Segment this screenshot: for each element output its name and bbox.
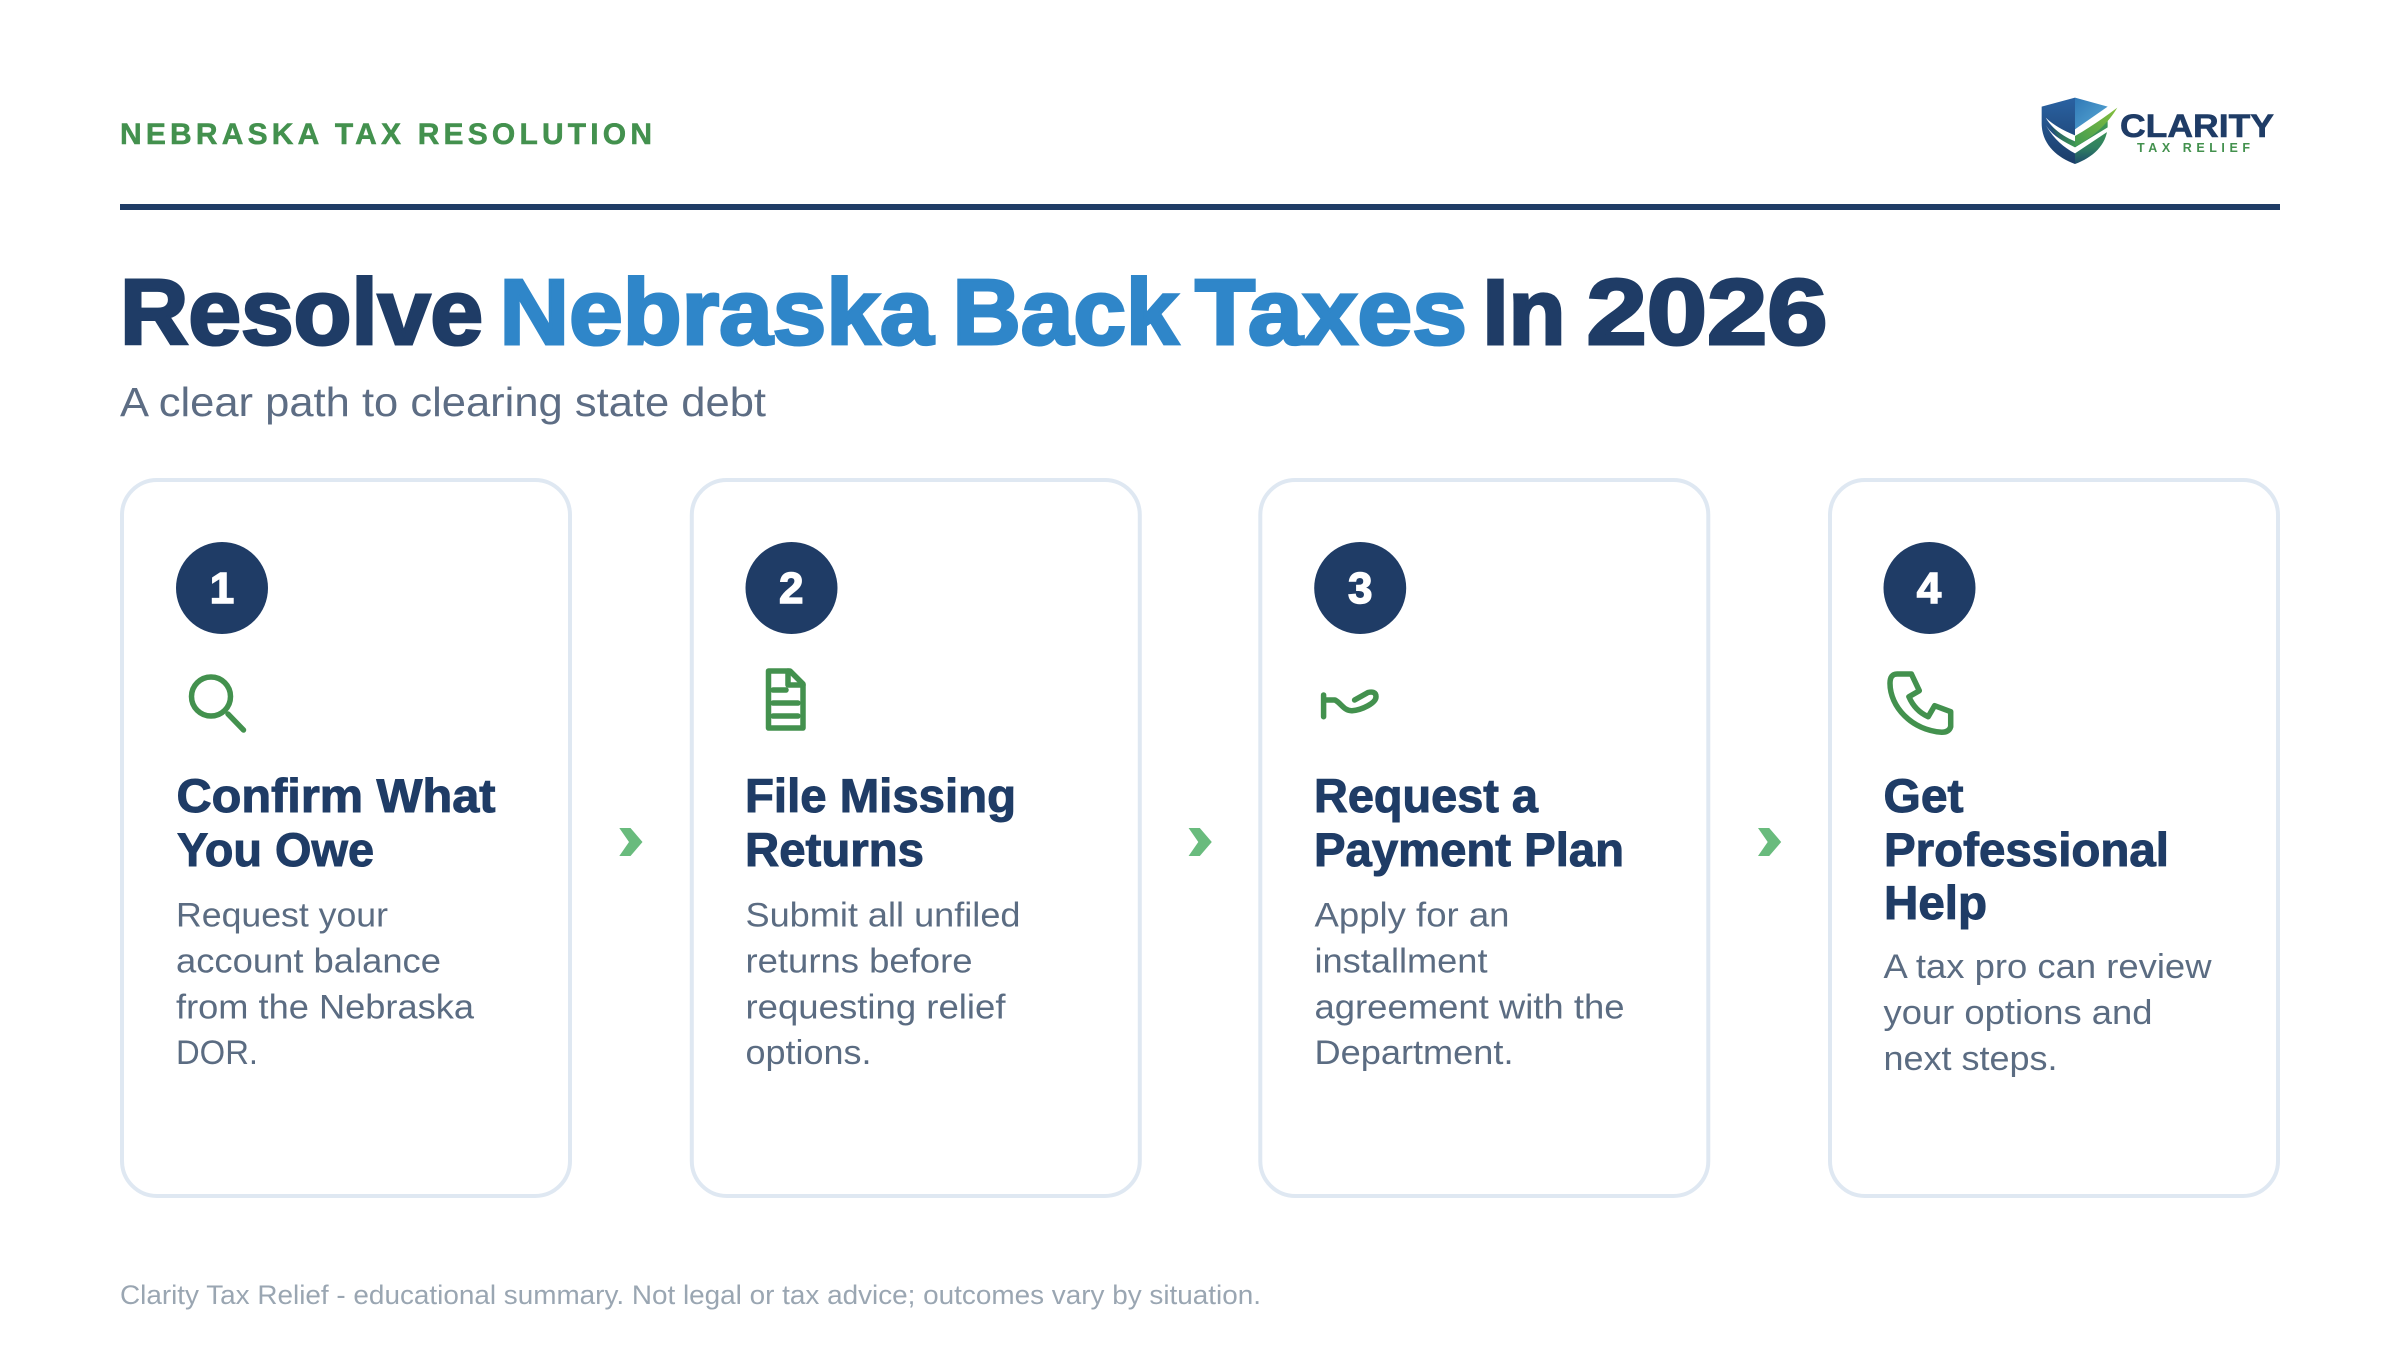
heading: Get Professional Help <box>1884 769 2169 929</box>
icon: telephone <box>1890 674 1951 732</box>
arrow 2 <box>1189 828 1212 856</box>
step number 3 <box>1314 542 1406 634</box>
body text: account balance <box>176 942 441 980</box>
body text <box>746 896 1020 1072</box>
body text: Department. <box>1314 1034 1514 1072</box>
panel: step 1 <box>122 480 570 1196</box>
heading: Confirm What You Owe <box>176 769 496 876</box>
body text: agreement with the <box>1314 988 1624 1026</box>
step number 2 <box>746 542 838 634</box>
title <box>120 260 1828 364</box>
header <box>120 98 2274 164</box>
body text: Request your <box>176 896 388 934</box>
body text: from the Nebraska <box>176 988 475 1026</box>
title: Nebraska <box>500 260 935 364</box>
step number 1 <box>176 542 268 634</box>
body text <box>1884 948 2212 1078</box>
header rule <box>120 204 2280 210</box>
subtitle: A clear path to clearing state debt <box>120 379 766 425</box>
step number 1: 1 <box>210 564 234 613</box>
heading: Request a Payment Plan <box>1314 769 1624 876</box>
heading: Confirm What You Owe: Confirm What <box>176 769 496 822</box>
step number 2: 2 <box>779 564 804 613</box>
body text <box>1314 896 1624 1072</box>
title: Resolve <box>120 260 483 364</box>
body text <box>176 896 475 1072</box>
eyebrow label: NEBRASKA TAX RESOLUTION <box>120 118 652 151</box>
icon: document <box>768 671 803 728</box>
heading: Get Professional Help: Get <box>1884 769 1964 822</box>
body text: your options and <box>1884 994 2152 1032</box>
body text: DOR. <box>176 1034 258 1072</box>
logo: Clarity Tax Relief <box>2042 98 2274 164</box>
title: Taxes <box>1195 260 1467 364</box>
arrow 3 <box>1758 828 1781 856</box>
title: Back <box>952 260 1179 364</box>
heading: Get Professional Help: Professional <box>1884 823 2169 876</box>
body text: returns before <box>746 942 972 980</box>
title: 2026 <box>1586 260 1828 364</box>
heading: Request a Payment Plan: Payment Plan <box>1314 823 1624 876</box>
body text: Apply for an <box>1314 896 1510 934</box>
panel: step 4 <box>1830 480 2278 1196</box>
body text: next steps. <box>1884 1040 2058 1078</box>
arrow 1 <box>619 828 642 856</box>
icon: handshake scrawl <box>1324 692 1376 717</box>
body text: Submit all unfiled <box>746 896 1020 934</box>
heading: Confirm What You Owe: You Owe <box>177 823 374 876</box>
heading: File Missing Returns: File Missing <box>745 769 1016 822</box>
body text: A tax pro can review <box>1884 948 2212 986</box>
logo tagline: TAX RELIEF <box>2137 141 2250 155</box>
footer disclaimer: Clarity Tax Relief - educational summary. Not legal or tax advice; outcomes vary by situation. <box>120 1280 1261 1310</box>
step number 4: 4 <box>1917 564 1942 613</box>
body text: options. <box>746 1034 872 1072</box>
title: In <box>1482 260 1566 364</box>
heading: Get Professional Help: Help <box>1884 876 1987 929</box>
heading: File Missing Returns: Returns <box>745 823 924 876</box>
step number 3: 3 <box>1348 564 1372 613</box>
heading: Request a Payment Plan: Request a <box>1314 769 1539 822</box>
icon: magnifying glass <box>192 677 244 730</box>
heading: File Missing Returns <box>745 769 1016 876</box>
panel: step 3 <box>1260 480 1708 1196</box>
panel: step 2 <box>692 480 1140 1196</box>
body text: installment <box>1314 942 1488 980</box>
body text: requesting relief <box>746 988 1006 1026</box>
step number 4 <box>1884 542 1976 634</box>
logo wordmark: CLARITY <box>2120 108 2274 144</box>
icon: shield with check <box>2042 98 2117 164</box>
